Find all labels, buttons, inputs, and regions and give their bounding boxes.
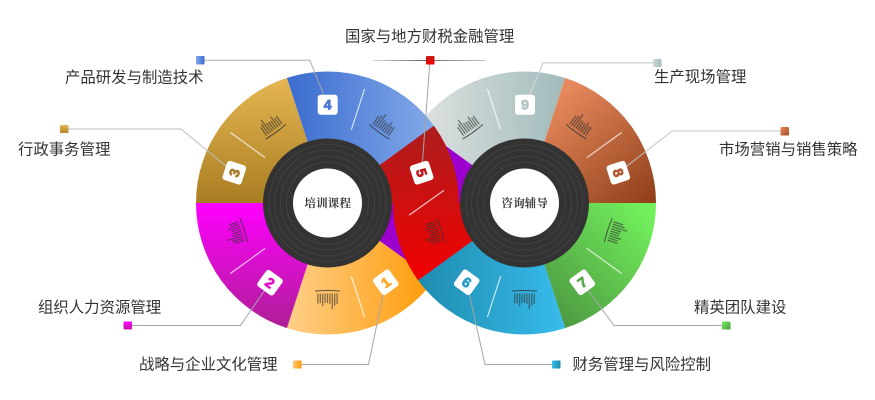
right hub: consulting <box>460 138 589 268</box>
badge 3: 3 <box>225 166 243 179</box>
sector 9 grey <box>418 71 565 203</box>
badge 8: 8 <box>609 167 627 179</box>
left hub: training courses <box>263 138 392 268</box>
icon: sector 4 chart <box>369 110 400 140</box>
badge 1 <box>372 268 400 296</box>
icon: sector 1 chart <box>315 290 340 309</box>
callout 1: 战略与企业文化管理: 战略与企业文化管理 <box>139 356 278 374</box>
callout 5: 国家与地方财税金融管理: 国家与地方财税金融管理 <box>345 28 514 46</box>
callout 6: 财务管理与风险控制 <box>467 282 711 374</box>
right wheel purple sector <box>393 126 524 280</box>
divider strokes <box>230 89 622 317</box>
sector 6 teal <box>418 203 565 335</box>
badge 7: 7 <box>574 273 590 291</box>
sector 8 brown <box>524 78 656 203</box>
icon: sector 5 chart <box>420 218 445 248</box>
callout 9: 生产现场管理 <box>525 59 746 105</box>
sector 4 blue <box>287 71 434 203</box>
left hub: training courses: 培训课程 <box>304 195 351 211</box>
badge 5: 5 <box>413 167 431 179</box>
callout 6: 财务管理与风险控制: 财务管理与风险控制 <box>572 356 711 374</box>
sector 5 red <box>328 126 524 280</box>
left wheel purple sector <box>328 126 459 280</box>
callout 7: 精英团队建设: 精英团队建设 <box>694 298 786 316</box>
callout 8: 市场营销与销售策略 <box>618 127 858 173</box>
callout 2: 组织人力资源管理 <box>38 283 270 330</box>
badge 1: 1 <box>378 273 394 291</box>
sector 2 magenta <box>196 203 328 328</box>
callout 8: 市场营销与销售策略: 市场营销与销售策略 <box>719 140 858 158</box>
panel: twin wheel diagram <box>196 71 656 335</box>
callout 9: 生产现场管理: 生产现场管理 <box>654 68 746 86</box>
callout 1: 战略与企业文化管理 <box>139 282 386 374</box>
badge 2 <box>256 269 284 297</box>
badge 2: 2 <box>262 274 278 292</box>
sector 7 green <box>524 203 656 328</box>
icon: sector 6 chart <box>512 290 537 309</box>
icon: sector 8 chart <box>566 110 597 140</box>
badge 4: 4 <box>324 97 332 113</box>
badge 5 <box>409 160 434 185</box>
badge 7 <box>568 268 596 296</box>
callout 5: 国家与地方财税金融管理 <box>345 28 514 172</box>
callout 7: 精英团队建设 <box>582 282 786 330</box>
callout 4: 产品研发与制造技术: 产品研发与制造技术 <box>65 68 204 86</box>
icon: sector 2 chart <box>223 218 248 248</box>
right hub: consulting: 咨询辅导 <box>501 195 548 211</box>
callout 3: 行政事务管理 <box>18 125 234 173</box>
badge 9: 9 <box>521 97 529 113</box>
sector 1 orange <box>287 203 434 335</box>
badge 4 <box>318 95 338 115</box>
badge 6 <box>453 268 481 296</box>
callout 3: 行政事务管理: 行政事务管理 <box>18 140 110 158</box>
callout 2: 组织人力资源管理: 组织人力资源管理 <box>38 298 161 316</box>
badge 3 <box>222 160 247 185</box>
icon: sector 7 chart <box>604 218 629 248</box>
callout 4: 产品研发与制造技术 <box>65 56 328 104</box>
icon: sector 3 chart <box>255 110 286 140</box>
badge 6: 6 <box>459 274 475 291</box>
icon: sector 9 chart <box>452 110 483 140</box>
badge 8 <box>606 160 631 185</box>
sector 3 gold <box>196 78 328 203</box>
badge 9 <box>515 95 535 115</box>
